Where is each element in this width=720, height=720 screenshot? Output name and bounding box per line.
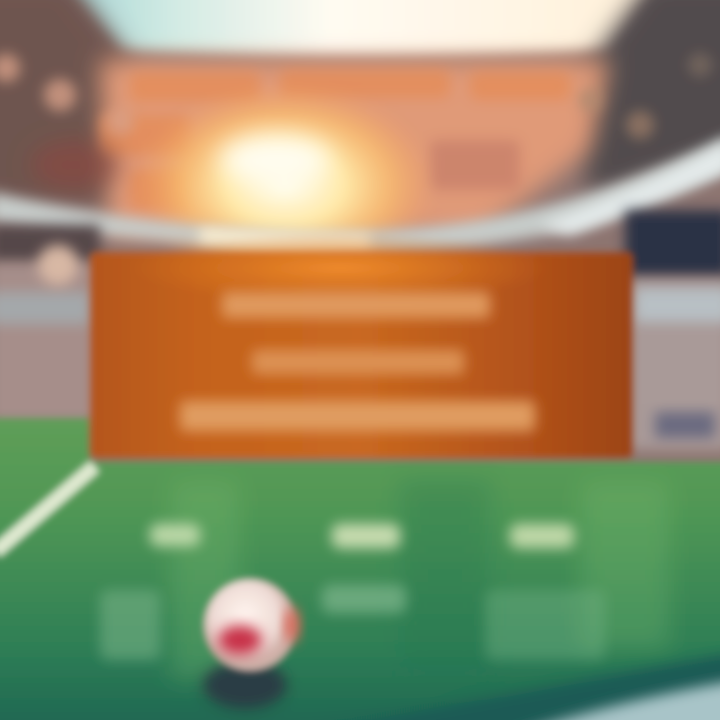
panel heading line 3	[180, 401, 535, 431]
sky	[60, 0, 660, 56]
stat detail centre	[322, 585, 406, 613]
stands: warm glow blotches	[100, 70, 570, 210]
panel heading line 2	[252, 350, 464, 374]
roof band	[0, 135, 720, 251]
sun glare	[135, 85, 435, 285]
stat label centre	[332, 524, 400, 548]
orange panel	[90, 232, 633, 458]
bottom dark band	[280, 652, 720, 720]
stands: left dark	[0, 0, 130, 205]
icon: soccer ball	[203, 579, 300, 709]
stat detail left	[100, 590, 160, 660]
lower stands left	[0, 225, 100, 422]
pitch stripes	[170, 480, 670, 680]
stat detail right	[485, 590, 605, 660]
pitch stat columns	[100, 524, 605, 660]
stat label left	[150, 524, 200, 546]
stat label right	[510, 524, 574, 548]
lower stands right	[625, 210, 720, 450]
crowd highlights	[0, 53, 712, 139]
touchline	[0, 466, 95, 552]
grass pitch	[0, 418, 720, 720]
panel heading line 1	[222, 292, 490, 318]
stands: right dark	[570, 0, 720, 195]
stands: orange tiers	[100, 60, 610, 235]
